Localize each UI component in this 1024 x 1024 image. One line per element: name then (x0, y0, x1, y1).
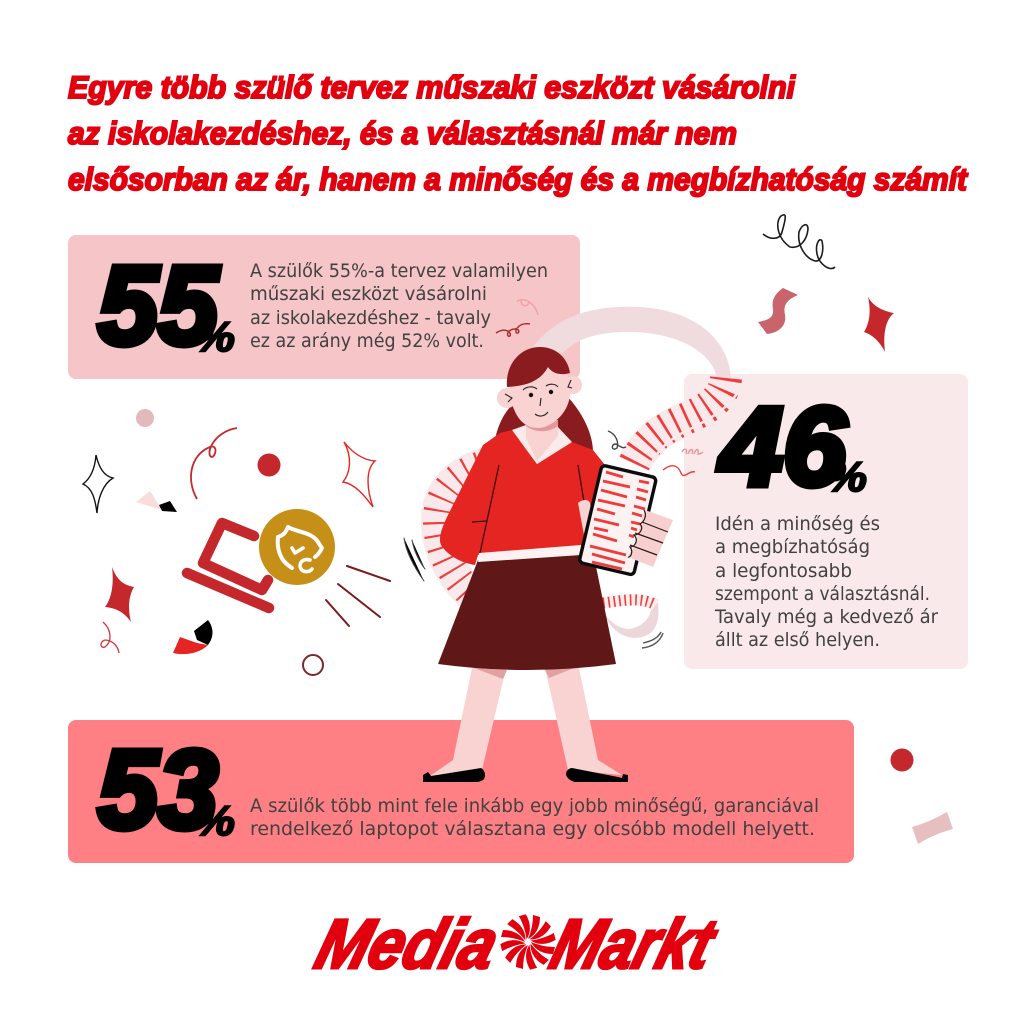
text: 53 percent description (250, 796, 819, 840)
title (68, 69, 968, 197)
stat: 55%: % (194, 313, 235, 360)
text: 55 percent description: az iskolakezdéshez - tavaly (250, 308, 491, 329)
text: 55 percent description (250, 261, 548, 352)
tablet (579, 465, 656, 575)
text: 53 percent description: A szülők több mint fele inkább egy jobb minőségű, garanciával (250, 796, 819, 817)
decorative confetti: bottom right (890, 748, 953, 844)
laptop (187, 523, 269, 608)
decorative confetti: left (83, 409, 375, 675)
title: elsősorban az ár, hanem a minőség és a megbízhatóság számít (68, 161, 968, 197)
shield (278, 527, 322, 572)
stat: 53%: % (194, 797, 235, 844)
decorative confetti: top right (758, 215, 894, 352)
text: 55 percent description: ez az arány még 52% volt. (250, 331, 484, 352)
facial features (505, 380, 572, 416)
title: Egyre több szülő tervez műszaki eszközt vásárolni (68, 69, 796, 105)
text: 46 percent description: a legfontosabb (715, 561, 852, 582)
text: 46 percent description: állt az első helyen. (715, 630, 880, 651)
hair top (507, 347, 570, 387)
text: 55 percent description: A szülők 55%-a tervez valamilyen (250, 261, 548, 282)
text: 53 percent description: rendelkező laptopot választana egy olcsóbb modell helyett. (250, 819, 815, 840)
skirt (438, 552, 616, 670)
stat: 46%: % (826, 453, 867, 500)
face (508, 365, 570, 428)
legs (430, 668, 622, 776)
text: 46 percent description: Tavaly még a kedvező ár (714, 607, 938, 628)
forearm (578, 500, 592, 535)
hand (628, 510, 673, 567)
motion lines (326, 538, 425, 626)
stat: 53%: 53 (98, 728, 218, 852)
collar and neck (512, 425, 572, 464)
panel: 55 percent (68, 235, 580, 379)
stat: 46%: 46 (718, 385, 847, 509)
text: 46 percent description: a megbízhatóság (715, 537, 870, 558)
shoes (423, 768, 628, 782)
logo spiral (499, 913, 557, 971)
text: 46 percent description (714, 514, 938, 651)
text: 46 percent description: Idén a minőség és (715, 514, 880, 535)
logo: MediaMarkt: Markt (543, 905, 726, 984)
sweater fold lines (472, 465, 584, 553)
decorative squiggles around ribbon (496, 300, 703, 648)
badge (259, 509, 335, 585)
text: 46 percent description: szempont a választásnál. (715, 584, 930, 605)
figure: woman holding tablet (423, 347, 673, 782)
panel: 53 percent (68, 720, 854, 863)
ribbon behind figure (438, 307, 738, 638)
text: 55 percent description: műszaki eszközt vásárolni (250, 284, 487, 305)
title: az iskolakezdéshez, és a választásnál már nem (68, 115, 737, 151)
panel: 46 percent (684, 374, 968, 669)
belt (478, 545, 581, 562)
logo: MediaMarkt: Media (308, 905, 507, 984)
stat: 55%: 55 (98, 244, 220, 368)
sweater (440, 430, 605, 565)
hair back (496, 396, 593, 450)
icon: laptop with warranty badge (187, 509, 335, 608)
logo: MediaMarkt (308, 905, 726, 984)
ears (497, 388, 517, 408)
